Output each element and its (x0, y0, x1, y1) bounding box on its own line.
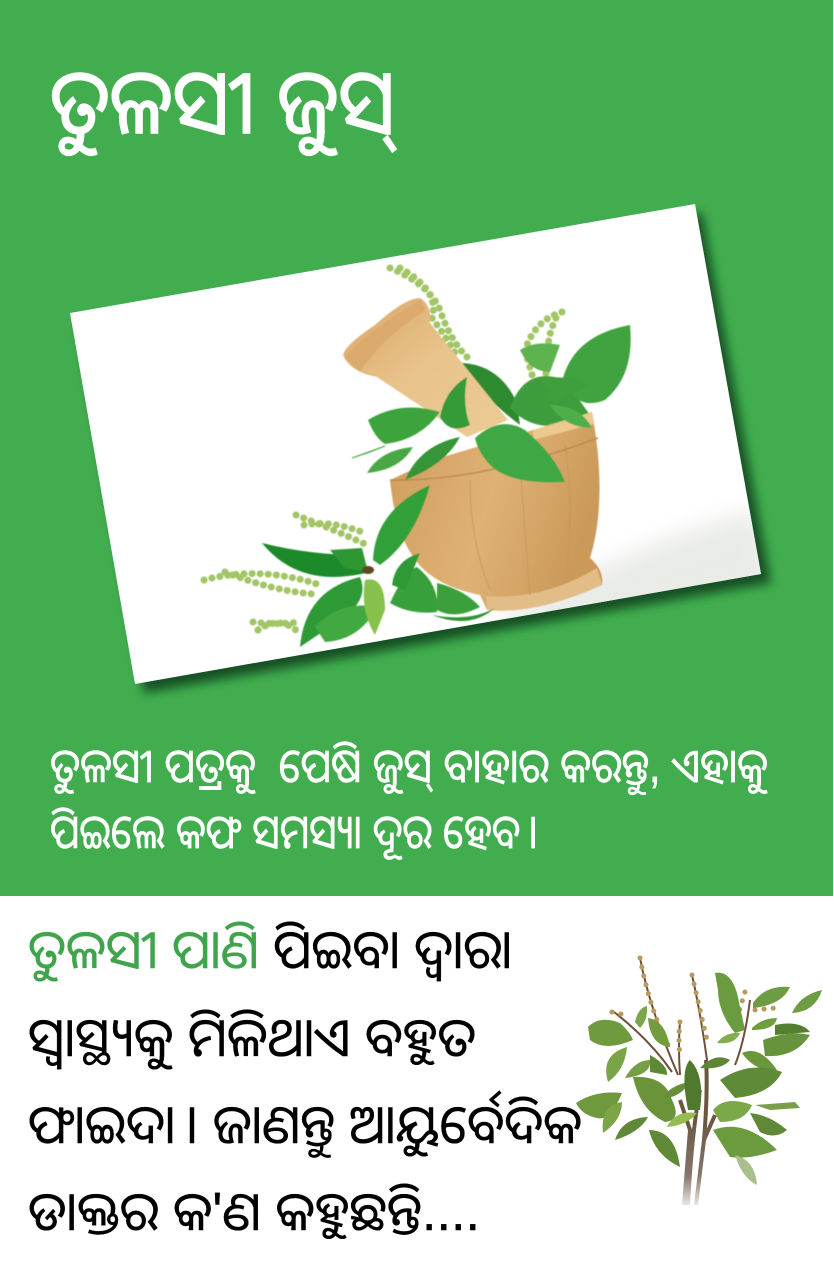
seed spikes (204, 268, 562, 632)
headline text block (28, 920, 582, 1242)
photo: tulsi with wooden mortar (70, 204, 775, 693)
lower stems (680, 1060, 715, 1205)
icon: tulsi plant (576, 958, 822, 1205)
headline text block: ଫାଇଦା । ଜାଣନ୍ତୁ ଆୟୁର୍ବେଦିକ (28, 1090, 582, 1158)
leaves on table (373, 485, 430, 565)
headline text block: ଡାକ୍ତର କ'ଣ କହୁଛନ୍ତି.... (28, 1182, 480, 1242)
back leaves in mortar (462, 363, 520, 425)
leaves on mortar (563, 325, 631, 403)
flowers (612, 958, 775, 1055)
icon: mortar bowl (390, 412, 602, 611)
headline text block: ସ୍ୱାସ୍ଥ୍ୟକୁ ମିଳିଥାଏ ବହୁତ (28, 1008, 476, 1070)
headline text block: ତୁଳସୀ ପାଣି ପିଇବା ଦ୍ୱାରା (28, 920, 512, 982)
caption text (50, 739, 768, 860)
stems (614, 958, 750, 1075)
icon: pestle (343, 298, 508, 437)
green background panel (0, 0, 833, 896)
title: ତୁଳସୀ ଜୁସ୍ (50, 53, 397, 156)
tulsi leaves (576, 973, 822, 1185)
caption text: ପିଇଲେ କଫ ସମସ୍ୟା ଦୂର ହେବ । (50, 805, 538, 860)
